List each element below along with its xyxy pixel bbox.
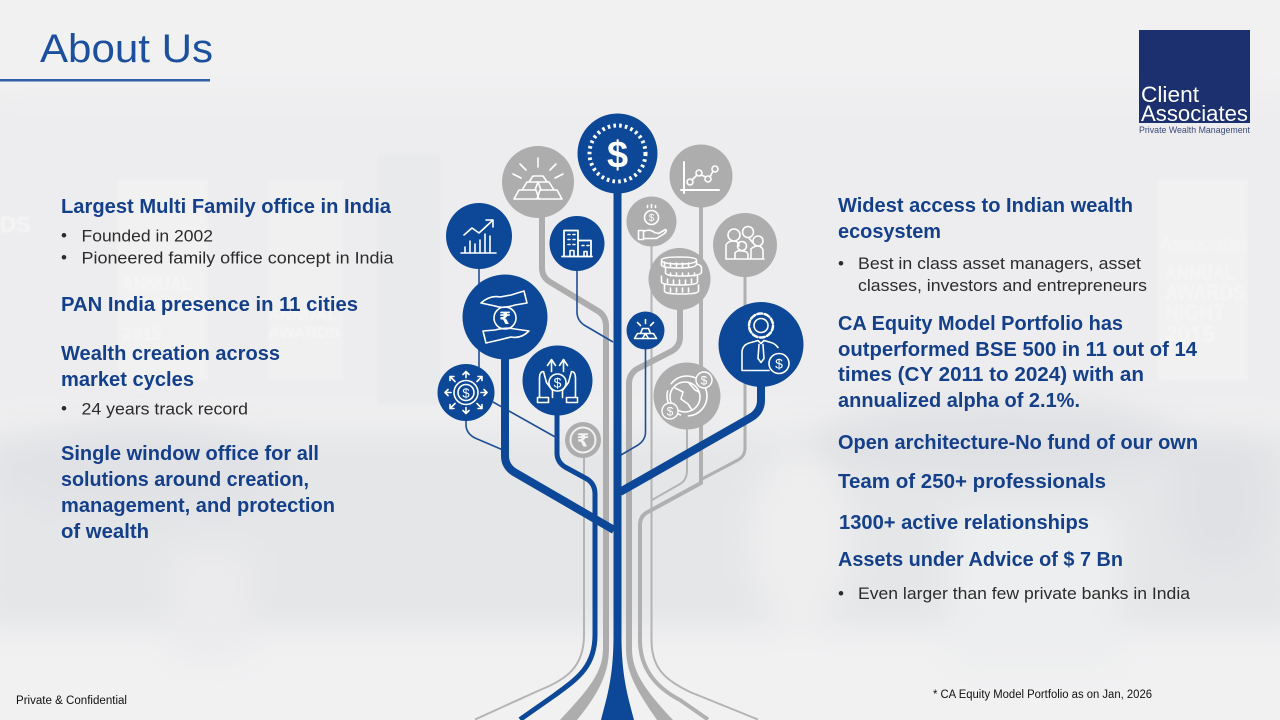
point: wealth creation — [61, 343, 280, 418]
footer: portfolio footnote: * CA Equity Model Portfolio as on Jan, 2026 — [933, 689, 1152, 701]
background: faded event photograph: ANNUAL — [268, 307, 338, 324]
circle: advisor with gear: $ — [775, 356, 783, 372]
logo: Client Associates: Private Wealth Management — [1139, 125, 1250, 135]
tree branches — [466, 150, 761, 720]
circle: globe with coins: $ — [667, 404, 674, 418]
point: widest access: ecosystem — [838, 221, 941, 243]
circle: small gold bars — [626, 312, 664, 350]
point: single window office: of wealth — [61, 521, 149, 543]
circle: small rupee: ₹ — [577, 430, 589, 450]
background: faded event photograph: NIGHT — [1165, 300, 1225, 325]
point: widest access: • — [838, 254, 844, 273]
point: widest access — [838, 195, 1147, 295]
circle: buildings — [550, 216, 604, 271]
point: team: Team of 250+ professionals — [838, 471, 1106, 493]
circle: coin stack — [648, 248, 710, 310]
point: largest multi family office: Largest Multi Family office in India — [61, 196, 392, 218]
point: PAN India presence: PAN India presence in 11 cities — [61, 294, 358, 316]
point: widest access: classes, investors and entrepreneurs — [858, 276, 1147, 295]
circle: advisor with gear — [718, 302, 804, 387]
background: faded event photograph: AWARDS — [1165, 280, 1245, 305]
circle: top dollar — [578, 114, 658, 194]
point: widest access: Widest access to Indian wealth — [838, 195, 1133, 217]
point: equity model portfolio: CA Equity Model Portfolio has — [838, 313, 1123, 335]
right text column — [838, 195, 1198, 603]
background: faded event photograph: AWARDS — [268, 325, 340, 342]
point: assets under advice — [838, 549, 1191, 603]
point: largest multi family office: • — [61, 226, 67, 245]
circle: hands growing money — [522, 346, 592, 416]
circle: globe with coins — [654, 362, 720, 430]
point: largest multi family office: Founded in 2002 — [82, 226, 213, 246]
circle: gold bars — [502, 146, 574, 218]
background: faded event photograph: DS — [0, 212, 31, 237]
circle: rupee in hands: ₹ — [499, 309, 511, 328]
background: faded event photograph: 2015 — [122, 324, 162, 344]
footer: confidentiality note: Private & Confidential — [16, 695, 127, 707]
circle: hand with coin — [626, 196, 676, 246]
point: wealth creation: market cycles — [61, 369, 194, 391]
point: largest multi family office: Pioneered family office concept in India — [82, 248, 394, 268]
background: faded event photograph: AWARDS — [122, 294, 202, 314]
circle: bar chart arrow — [446, 203, 512, 269]
circle: top dollar: $ — [607, 134, 628, 176]
point: relationships: 1300+ active relationships — [839, 512, 1089, 534]
background: faded event photograph: 2015 — [1165, 322, 1215, 347]
background: faded event photograph: ANNUAL — [122, 274, 192, 294]
tree illustration — [438, 114, 804, 720]
left text column — [61, 196, 394, 543]
point: equity model portfolio — [838, 313, 1198, 412]
point: single window office: management, and protection — [61, 495, 335, 517]
circle: hand with coin: $ — [649, 213, 655, 224]
point: open architecture: Open architecture-No fund of our own — [838, 432, 1198, 454]
logo: Client Associates — [1139, 30, 1250, 135]
circle: line chart — [670, 144, 732, 208]
circle: globe with coins: $ — [701, 374, 708, 388]
logo: Client Associates: Associates — [1141, 101, 1248, 126]
circle: small rupee — [565, 422, 601, 458]
background: faded event photograph: Associates — [1160, 234, 1248, 255]
point: wealth creation: 24 years track record — [82, 400, 248, 418]
point: largest multi family office: • — [61, 248, 67, 267]
logo: Client Associates: Client — [1141, 82, 1199, 107]
point: single window office: Single window office for all — [61, 443, 319, 465]
point: equity model portfolio: times (CY 2011 to 2024) with an — [838, 364, 1144, 386]
circle: dollar with arrows: $ — [462, 386, 470, 400]
point: equity model portfolio: outperformed BSE 500 in 11 out of 14 — [838, 339, 1198, 361]
circle: family — [713, 213, 777, 277]
point: widest access: Best in class asset managers, asset — [858, 254, 1141, 273]
circle: dollar with arrows — [438, 364, 494, 421]
point: single window office — [61, 443, 335, 543]
point: wealth creation: • — [61, 399, 67, 418]
point: assets under advice: Even larger than few private banks in India — [858, 584, 1191, 603]
circle: rupee in hands — [462, 274, 548, 360]
point: wealth creation: Wealth creation across — [61, 343, 280, 365]
point: equity model portfolio: annualized alpha of 2.1%. — [838, 390, 1080, 412]
background: faded event photograph: ANNUAL — [1165, 260, 1235, 285]
point: single window office: solutions around creation, — [61, 469, 309, 491]
title: About Us — [40, 27, 213, 71]
point: assets under advice: • — [838, 584, 844, 603]
point: assets under advice: Assets under Advice of $ 7 Bn — [838, 549, 1123, 571]
point: largest multi family office — [61, 196, 394, 268]
circle: hands growing money: $ — [554, 374, 562, 390]
